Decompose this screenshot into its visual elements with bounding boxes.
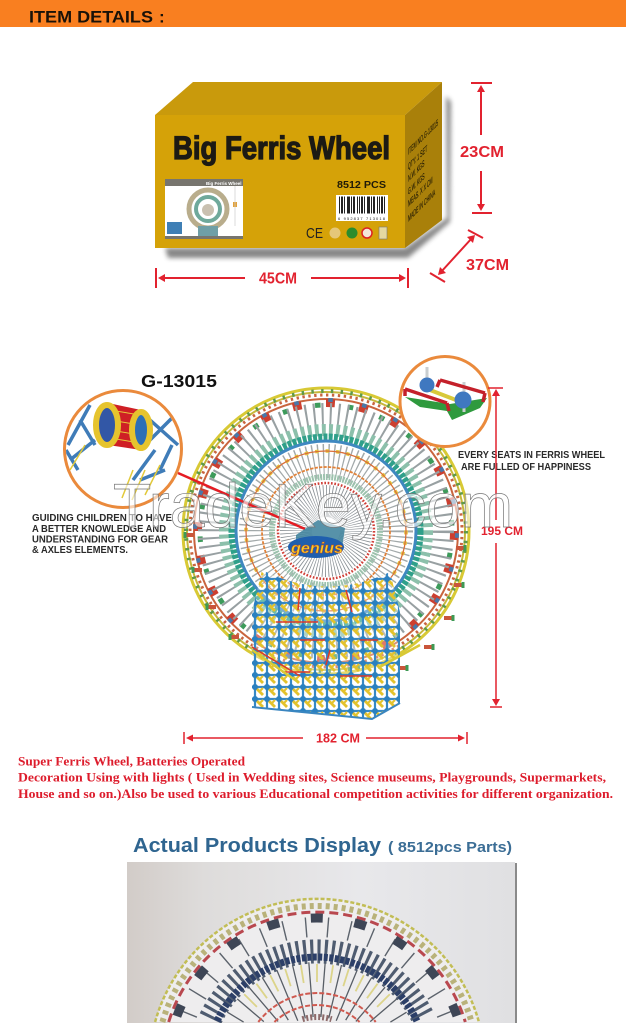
section heading: ( 8512pcs Parts) [388,839,512,856]
height dimension 195 CM [481,388,523,707]
callout circle: gear detail [64,390,182,508]
callout text: gears: GUIDING CHILDREN TO HAVE [32,512,172,524]
description text: House and so on.)Also be used to various Educational competition activities for different organization. [18,787,613,801]
hub spokes [296,501,356,561]
red pointer line [178,473,305,529]
box thumbnail: Big Ferris Wheel [206,181,242,186]
barcode: 6 952837 713018 [338,216,386,221]
height dimension 23CM [460,83,504,213]
photo wheel rim [155,899,479,1022]
height dimension 195 CM: 195 CM [481,524,523,538]
description text [18,754,613,801]
box side label: ITEM NO.G-13015 [408,116,438,157]
outer rim [183,388,469,674]
logo [288,520,345,558]
box side label: QTY: 1 SET [408,142,427,172]
photo wheel disc [155,899,479,1022]
outer spokes [212,417,440,645]
width dimension 182 CM [184,732,467,746]
photo wheel outer spokes [178,918,456,1017]
product box [155,82,451,258]
header banner: ITEM DETAILS [29,8,153,26]
width dimension 45CM [156,268,408,288]
red and yellow rings [246,451,406,611]
tower [252,570,400,719]
teal gear ring [225,430,427,632]
width dimension 45CM: 45CM [259,270,297,288]
callout text: seats [458,449,606,473]
callout circle: seat detail [400,356,490,446]
piece count: 8512 PCS [337,179,386,191]
header banner: : [159,8,165,26]
callout text: gears [32,512,172,556]
box title: Big Ferris Wheel [173,130,390,166]
box side label [408,116,438,224]
callout text: gears: & AXLES ELEMENTS. [32,544,128,556]
section heading: Actual Products Display [133,834,382,857]
callout text: seats: EVERY SEATS IN FERRIS WHEEL [458,449,606,461]
height dimension 23CM: 23CM [460,144,504,161]
logo: genius [290,540,343,557]
inner spokes [256,461,396,601]
depth dimension 37CM: 37CM [466,257,509,274]
callout text: gears: A BETTER KNOWLEDGE AND [32,523,166,535]
description text: Decoration Using with lights ( Used in Wedding sites, Science museums, Playgrounds, Supermarkets, [18,770,606,784]
header banner [0,0,626,27]
outer seat clusters [185,532,465,671]
callout text: gears: UNDERSTANDING FOR GEAR [32,534,168,546]
width dimension 182 CM: 182 CM [316,732,360,746]
description text: Super Ferris Wheel, Batteries Operated [18,754,245,768]
box side label: N.W. KGS [408,157,424,184]
barcode [336,195,388,221]
section heading [133,834,512,857]
tower red struts [252,588,378,676]
photo wheel blue ring [211,951,423,1021]
box side label: MADE IN CHINA [408,186,435,224]
box dimensions [156,83,509,288]
certification icons [306,225,387,242]
model number: G-13015 [141,371,217,391]
tower lower rim [252,645,420,682]
box side label: G.W. KGS [408,170,425,197]
depth dimension 37CM [430,230,509,282]
box side label: MEAS. X X CM [408,174,433,209]
product photo [127,862,517,1023]
photo wheel inner spokes [227,962,407,1022]
ferris wheel illustration [178,388,469,719]
photo wheel red rings [258,993,376,1022]
certification icons: CE [306,225,323,242]
seats [195,400,457,662]
photo wheel yellow rods [244,964,390,1007]
box thumbnail [165,179,243,239]
callout text: seats: ARE FULLED OF HAPPINESS [461,461,591,473]
watermark: TradeKey.com [113,472,513,541]
